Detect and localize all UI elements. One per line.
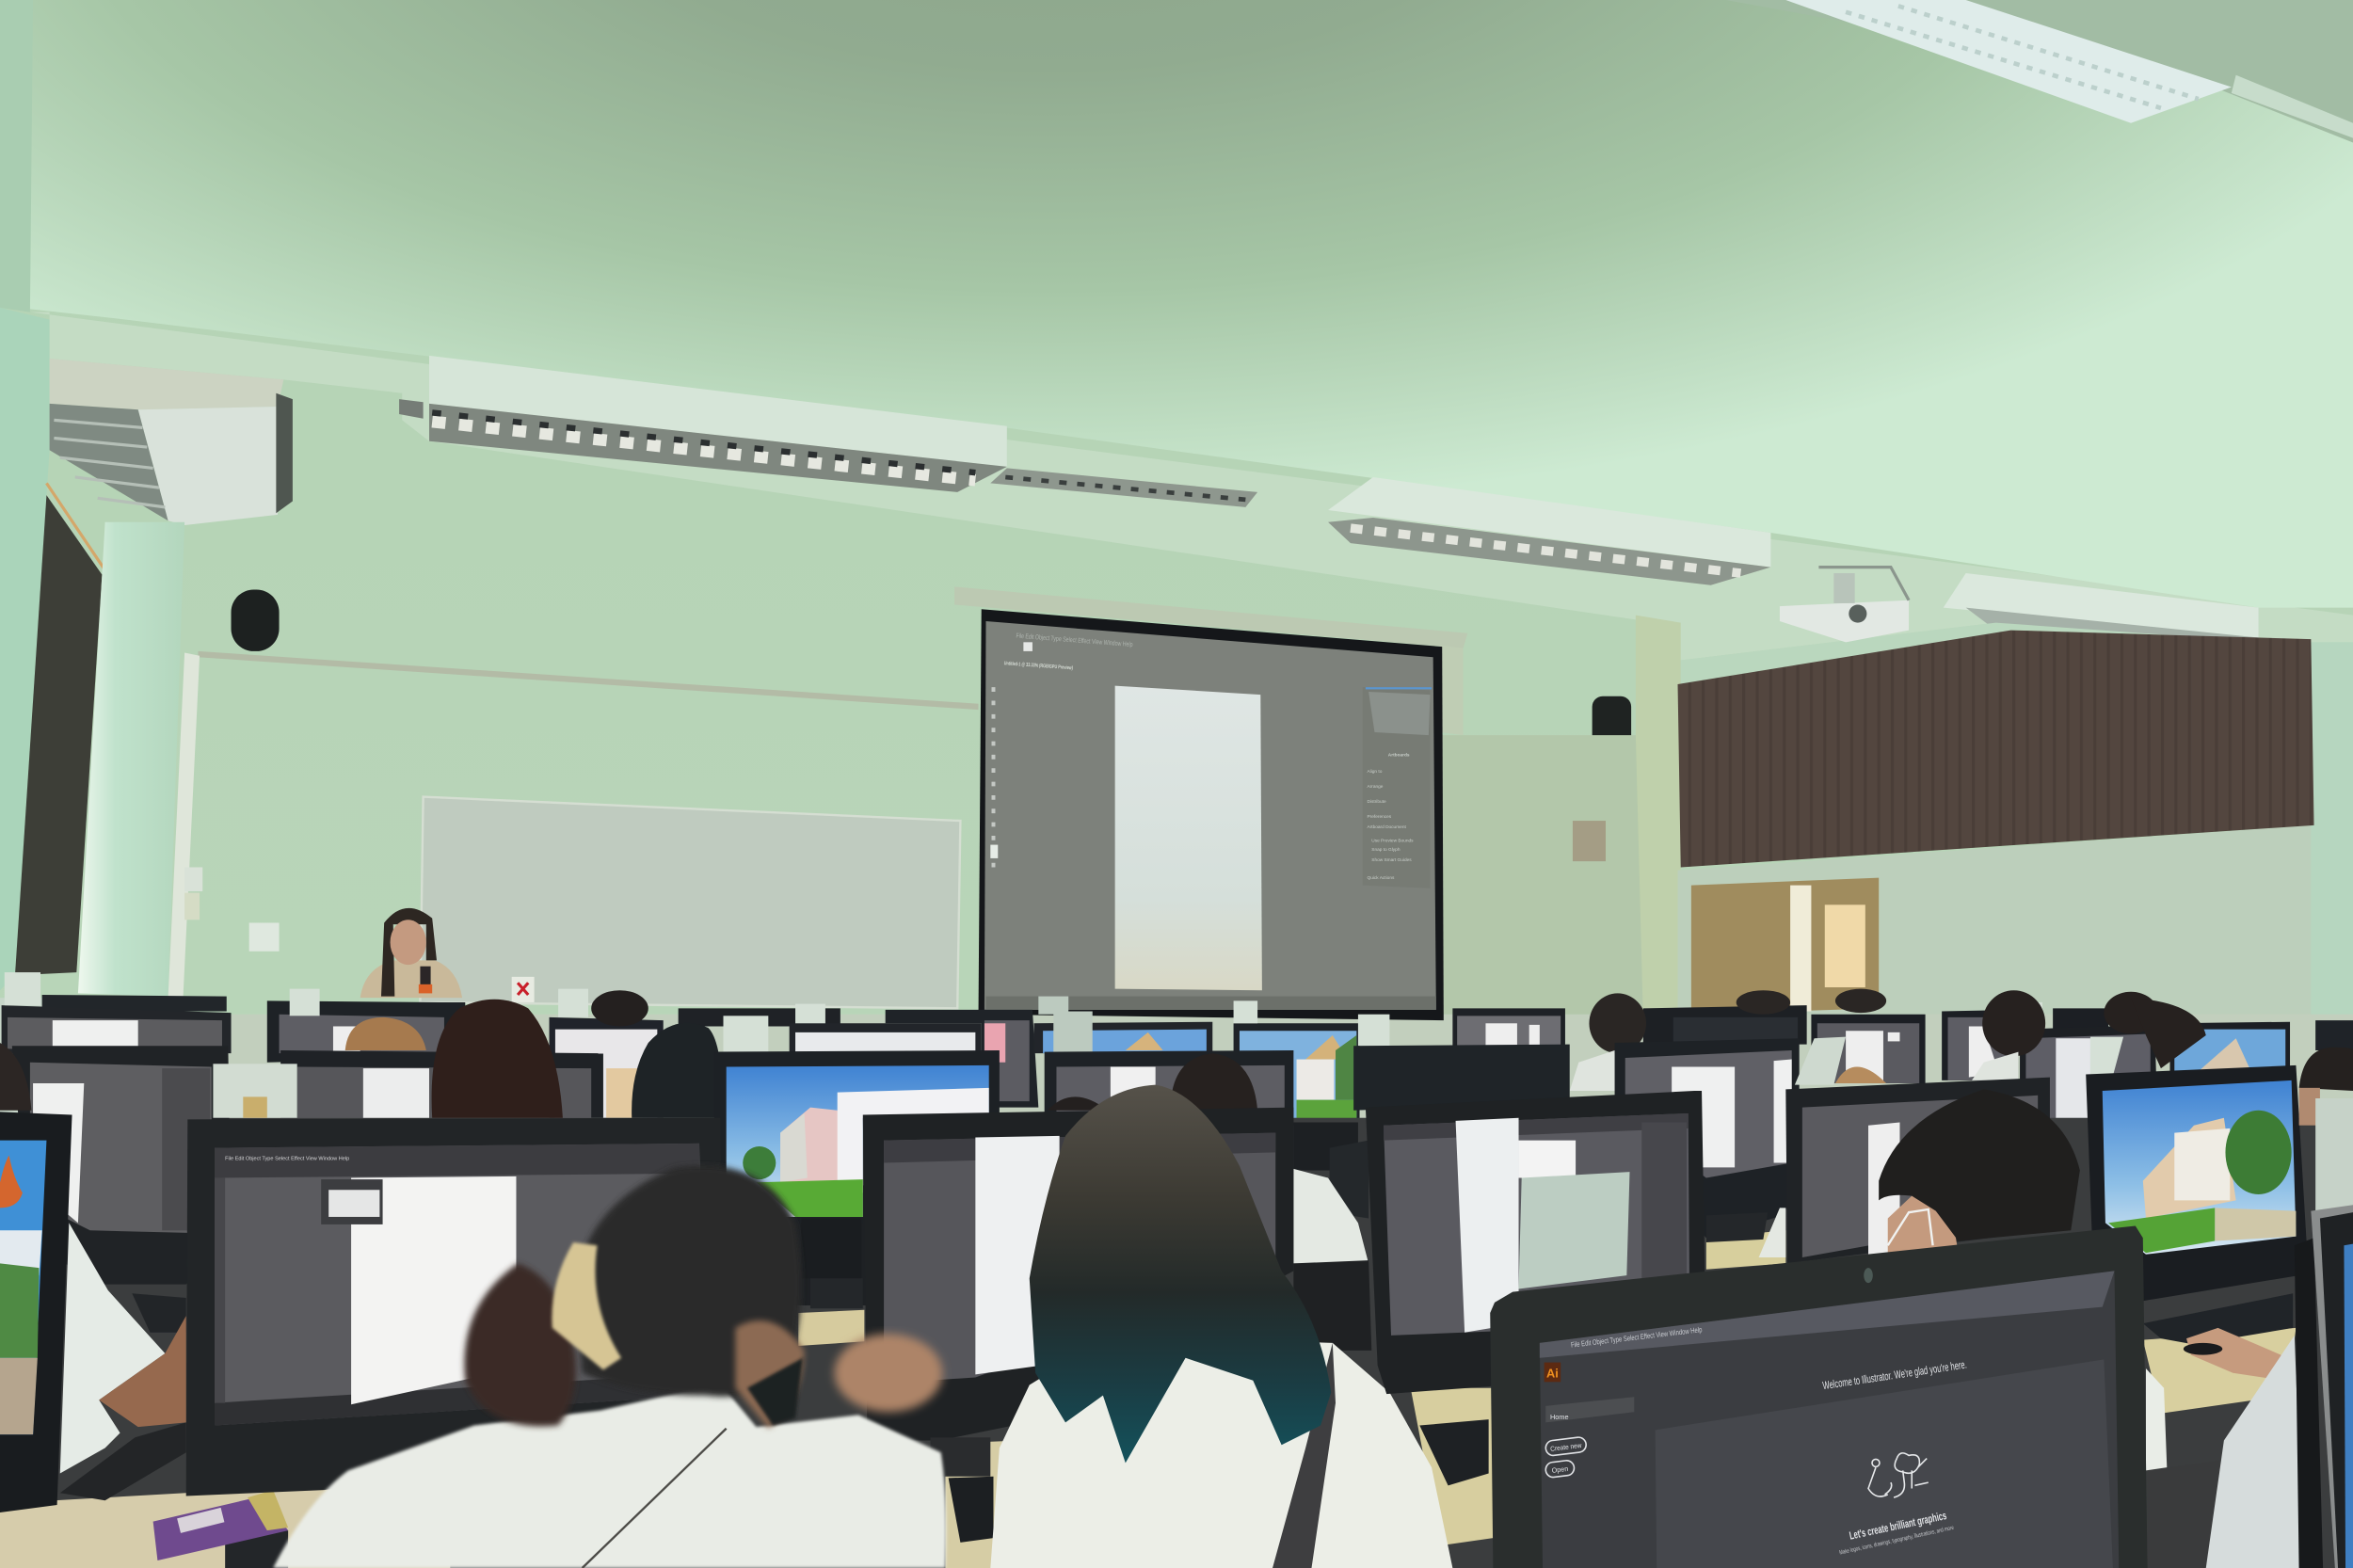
left side wall: [0, 308, 50, 990]
paper note: [213, 1064, 297, 1118]
projected tool panel: Quick Actions: [1367, 875, 1395, 881]
student with mouse on right: [2146, 1328, 2303, 1568]
ceiling projector: [1780, 568, 1909, 642]
Ai logo: [1545, 1363, 1561, 1382]
wall strip behind back row: [0, 998, 2353, 1133]
ceiling light fixture: [1785, 0, 2232, 123]
monitor: wallpaper campus center: [714, 1050, 1000, 1278]
left column: [78, 522, 184, 997]
Ai logo: Ai: [1546, 1367, 1559, 1381]
create new button: Create new: [1550, 1441, 1583, 1453]
loudspeaker left: [232, 590, 280, 651]
projected tool panel: Artboard Document: [1367, 824, 1406, 830]
window curtain on left: [15, 483, 105, 975]
projected tool panel: Artboards: [1388, 753, 1410, 759]
projection screen: [979, 609, 1444, 1020]
welcome heading: Welcome to Illustrator. We're glad you're here.: [1822, 1358, 1968, 1392]
paper notes on back monitors: [5, 972, 2123, 1076]
whiteboard rail and frame: [168, 651, 979, 998]
projected Illustrator menu: File Edit Object Type Select Effect View Window Help: [1016, 632, 1133, 648]
desk surfaces: [0, 1230, 2296, 1568]
monitor: mid row center: [1045, 1050, 1293, 1126]
projected document tab: Untitled-1 @ 33.33% (RGB/GPU Preview): [1004, 661, 1073, 671]
monitor: front left wallpaper: [0, 1112, 72, 1512]
air conditioner: [50, 359, 293, 525]
projected tool panel: [990, 642, 1432, 888]
second row heads left: [0, 1000, 723, 1118]
keyboards: [132, 1212, 2293, 1568]
person: student with short hair and mask: [1759, 1089, 2080, 1257]
office chair: [1293, 1260, 1371, 1351]
whiteboard: [420, 797, 960, 1008]
back row people: [591, 989, 2206, 1091]
person: student with teal hair: [990, 1085, 1452, 1568]
projected tool panel: Distribute: [1367, 799, 1386, 805]
wall thermostat and switch: [184, 867, 280, 952]
snack packet on desk: [153, 1490, 288, 1560]
person: blurred student with hair clip: [273, 1165, 946, 1568]
second row monitors left: [12, 1046, 603, 1285]
projected artboard: [1115, 686, 1262, 990]
monitor: mid row right: [1615, 1037, 1886, 1238]
projected tool panel: Align to: [1367, 769, 1383, 775]
back row monitors: [2, 972, 2353, 1148]
red X sign: [512, 977, 535, 1002]
monitor: wallpaper right: [2086, 1065, 2307, 1301]
brilliant graphics caption: Let's create brilliant graphics: [1849, 1509, 1948, 1543]
wooden door: [1691, 878, 1879, 1015]
monitor: front center: [863, 1108, 1293, 1477]
right upper wall: [1442, 616, 2353, 1032]
projected tool panel: Show Smart Guides: [1371, 857, 1412, 863]
projected tool panel: Arrange: [1367, 784, 1384, 790]
loudspeaker right: [1593, 696, 1631, 745]
open button: Open: [1551, 1464, 1569, 1475]
monitor menu text: File Edit Object Type Select Effect View Window Help: [225, 1156, 349, 1161]
presenter at front: [360, 908, 462, 998]
brown acoustic panel: [1678, 631, 2314, 867]
icon: illustration of plants: [1868, 1453, 1929, 1497]
projected taskbar: [986, 997, 1436, 1010]
monitor: welcome to Illustrator: [1490, 1226, 2148, 1568]
projected tool panel: Preferences: [1367, 814, 1392, 820]
caption subtitle: Make logos, icons, drawings, typography, illustrations, and more: [1839, 1525, 1955, 1557]
person left with white shirt: [60, 1223, 186, 1500]
paper note on monitor: [1519, 1172, 1630, 1288]
lower room dark base: [0, 1118, 2353, 1568]
ceiling soffit underside: [30, 312, 2353, 660]
projection screen housing: [954, 586, 1467, 735]
upper beam wall: [0, 0, 2353, 608]
projected tool panel: Use Preview Bounds: [1371, 838, 1414, 843]
student behind in white shirt: [1293, 1169, 1369, 1263]
monitor: dark back mid right: [1293, 1045, 1570, 1351]
monitor: front center left: [186, 1118, 722, 1496]
monitor: far right edge: [2295, 1205, 2353, 1568]
home label: Home: [1550, 1413, 1569, 1421]
keyboard stand: [931, 1437, 990, 1477]
projected tool panel: Snap to Glyph: [1371, 847, 1401, 853]
monitor menu bar text: File Edit Object Type Select Effect View Window Help: [1571, 1325, 1703, 1350]
mirror light fixtures: [399, 356, 2259, 651]
monitor: front right: [1366, 1091, 1706, 1394]
create new button: [1545, 1436, 1587, 1456]
note and head at right edge: [2299, 1048, 2353, 1212]
monitor: right with boy: [1785, 1078, 2050, 1263]
open button: [1545, 1460, 1575, 1478]
